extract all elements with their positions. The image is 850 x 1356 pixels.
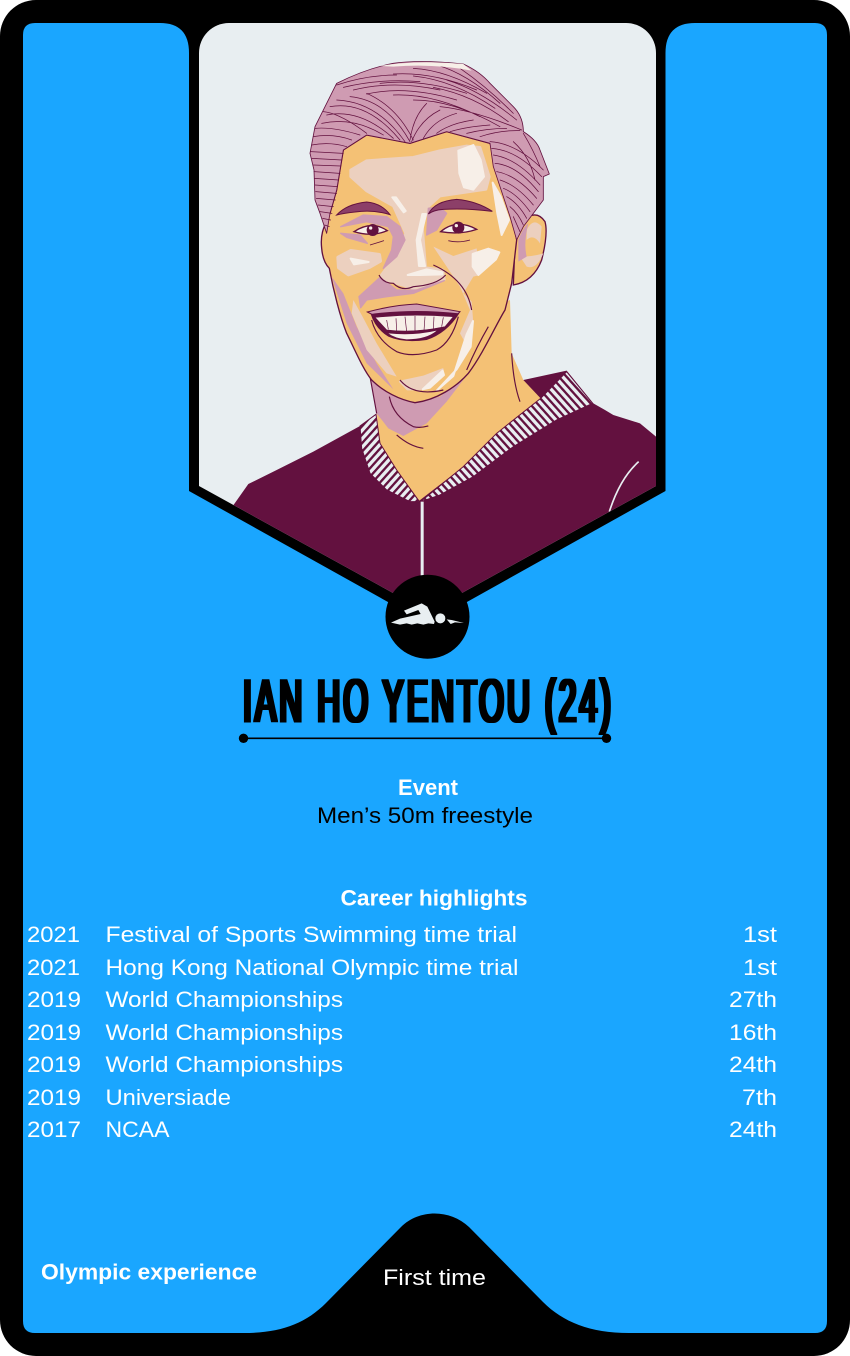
row 5: 24th [729,1052,777,1077]
upper lip shadow [359,277,444,308]
neck lines [370,353,520,448]
sleeve highlight [609,462,639,512]
neck shadow [371,378,464,436]
right glint [455,224,458,227]
badge circle [386,575,470,659]
row 2 [27,955,777,980]
row 3: 27th [729,987,777,1012]
portrait panel [199,23,656,633]
mouth [371,311,459,341]
row 5 [27,1052,777,1077]
upper lip [367,304,460,316]
right collar [421,372,593,502]
smile line light tone [352,300,397,377]
icon: swimmer [391,603,464,625]
row 6: 7th [742,1085,777,1110]
illustration of athlete [234,61,656,593]
event block [317,775,533,828]
row 1: Festival of Sports Swimming time trial [106,922,517,947]
row 6: Universiade [106,1085,231,1110]
row 5: 2019 [27,1052,81,1077]
left pupil [367,224,379,236]
ear detail [520,222,543,267]
hair strands [311,65,543,232]
row 2: 2021 [27,955,80,980]
forehead and nose light tone [351,146,489,289]
row 3: World Championships [106,987,343,1012]
row 2: Hong Kong National Olympic time trial [106,955,518,980]
face [321,132,517,403]
sport icon badge [386,575,470,659]
row 1: 1st [743,922,777,947]
event label: Event [398,775,459,800]
row 7: 2017 [27,1117,81,1142]
left glint [369,226,372,230]
left collar [360,414,419,502]
zip [421,502,424,582]
olympic experience label: Olympic experience [41,1260,257,1284]
left eye [354,224,387,236]
row 7: NCAA [106,1117,170,1142]
row 3 [27,987,777,1012]
row 7 [27,1117,777,1142]
row 3: 2019 [27,987,81,1012]
row 4: World Championships [106,1020,343,1045]
right eye socket shadow [427,207,447,235]
hair top highlight [380,62,472,71]
right eyebrow [428,199,492,214]
left eyebrow [337,202,390,215]
ear shadow [518,223,528,262]
right pupil [452,222,464,234]
row 6: 2019 [27,1085,81,1110]
hair [310,61,549,240]
row 7: 24th [729,1117,777,1142]
under eye lines [370,240,470,245]
right cheek light tone [434,246,478,340]
event value: Men’s 50m freestyle [317,803,533,828]
row 6 [27,1085,777,1110]
row 4 [27,1020,777,1045]
row 2: 1st [743,955,777,980]
white highlights [351,145,509,391]
left eye white [354,226,387,234]
row 4: 2019 [27,1020,81,1045]
lower teeth [388,331,437,339]
row 1 [27,922,777,947]
row 1: 2021 [27,922,80,947]
portrait background [199,23,656,623]
neck and chest [370,300,541,501]
left jaw shadow [332,277,393,389]
sweater [234,370,656,593]
career highlights table [27,922,777,1142]
career highlights heading: Career highlights [340,886,528,910]
left cheek light tone [338,251,380,275]
upper teeth [375,315,453,332]
olympic experience value: First time [383,1265,486,1290]
chin light tone [400,369,443,389]
name underline [239,734,611,743]
left eye socket shadow [341,215,405,268]
ear [513,215,546,285]
row 5: World Championships [106,1052,343,1077]
right eye [441,222,477,234]
row 4: 16th [729,1020,777,1045]
right eye white [441,224,477,233]
face lines [372,265,488,392]
